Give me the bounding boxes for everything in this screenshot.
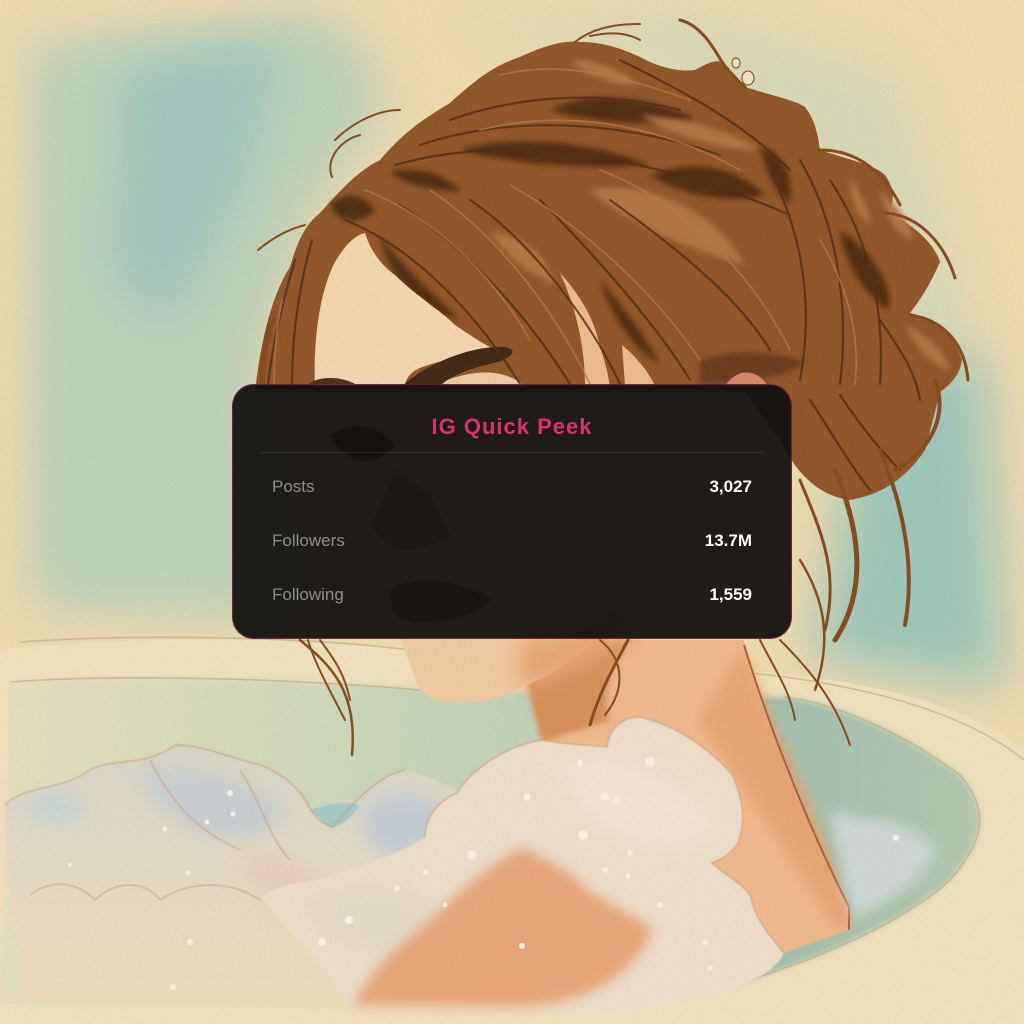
bathtub rim: [0, 640, 1024, 1024]
temple skin patches: [560, 273, 655, 386]
row: followers: [272, 531, 752, 550]
left foam: [5, 745, 500, 1010]
foam outlines: [5, 717, 784, 953]
bathtub outlines: [10, 637, 1024, 997]
ear: [725, 372, 768, 386]
foam soft highlights: [300, 756, 715, 954]
row: posts: Posts: [272, 477, 315, 496]
hair highlights: [490, 60, 950, 370]
bathtub inner water: [0, 678, 980, 1005]
row: following: 1,559: [709, 585, 752, 604]
face features beneath the card: [330, 426, 492, 623]
chest and neck: [522, 640, 849, 953]
forehead skin: [315, 233, 490, 386]
eyebrow outer end: [308, 378, 355, 384]
light hair strands: [274, 69, 856, 384]
right foam in tub: [830, 813, 934, 918]
teal wall wash: [30, 10, 1005, 690]
row: posts: [272, 477, 752, 496]
row: followers: Followers: [272, 531, 345, 550]
neck right shading: [700, 650, 852, 925]
hair shadows: [330, 98, 889, 384]
centre foam: [261, 717, 784, 1012]
neck shadow: [522, 640, 628, 742]
face: [315, 384, 650, 703]
eyebrow: [402, 347, 513, 386]
row: followers: 13.7M: [705, 531, 752, 550]
hair main mass: [255, 42, 962, 500]
bubbles: [68, 757, 899, 990]
flyaway wisps and curls: [258, 20, 968, 755]
cheek shade: [520, 570, 640, 690]
water gap between foam: [310, 803, 360, 828]
foam peach shading: [353, 847, 653, 1007]
hair clip pearls: [732, 58, 754, 85]
card title: IG Quick Peek: [432, 414, 592, 439]
row: following: [272, 585, 752, 604]
row: following: Following: [272, 585, 344, 604]
dark hair strands: [268, 60, 920, 490]
brow-bone skin: [430, 372, 525, 386]
card: IG Quick Peek: [232, 384, 792, 639]
neck edge line: [744, 645, 849, 930]
row: posts: 3,027: [709, 477, 752, 496]
